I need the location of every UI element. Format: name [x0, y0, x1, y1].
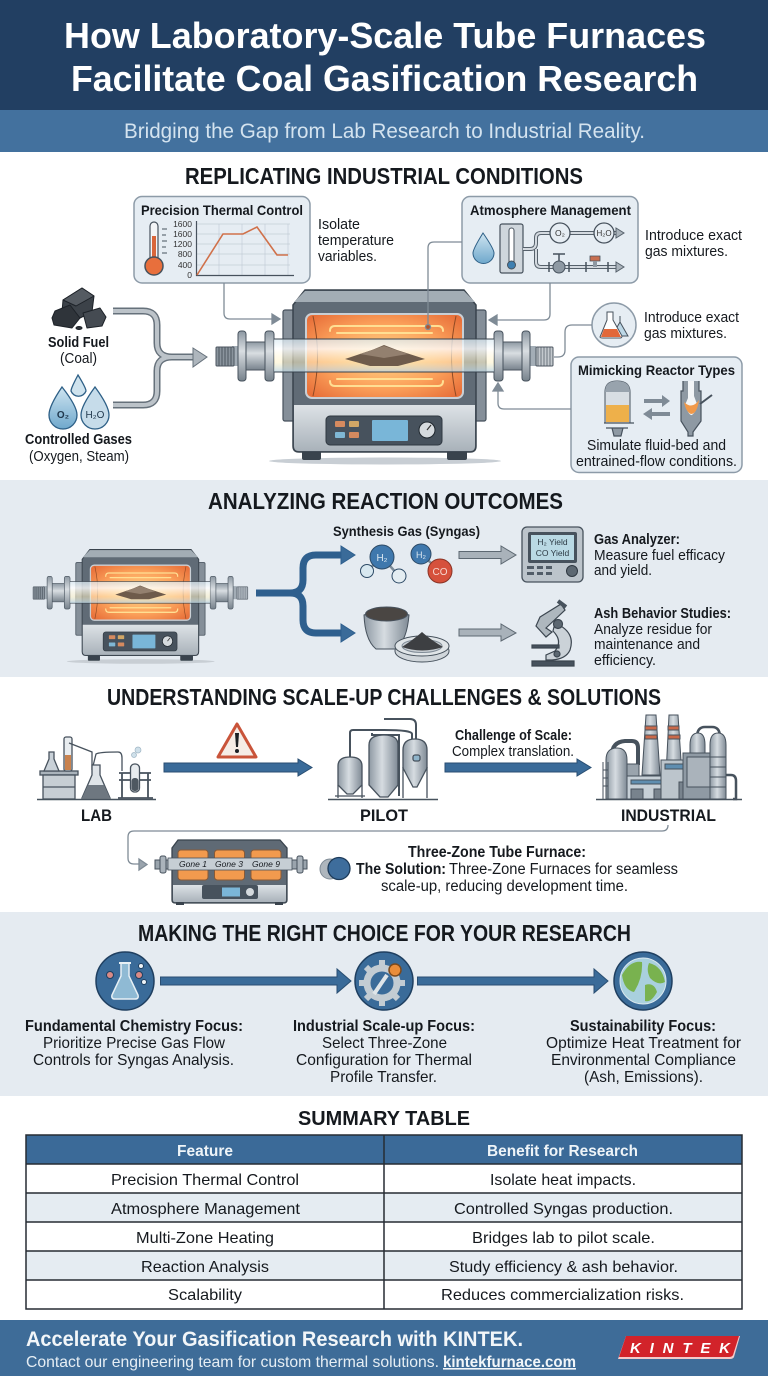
- icon: gear and wrench: [355, 952, 413, 1010]
- icon: microscope: [532, 601, 574, 666]
- note: isolate variables: variables.: [318, 249, 377, 265]
- label: solid fuel: Solid Fuel: [48, 335, 109, 351]
- heading: summary table: SUMMARY TABLE: [298, 1108, 470, 1130]
- text: three-zone solution: scale-up, reducing development time.: [381, 878, 628, 895]
- connectors: callouts to furnace: [224, 242, 592, 409]
- text: ash behavior: Ash Behavior Studies:: [594, 606, 731, 622]
- label: synthesis gas: Synthesis Gas (Syngas): [333, 524, 480, 539]
- text: three-zone solution: Three-Zone Tube Furnace:: [408, 844, 586, 861]
- note: gas mixtures: gas mixtures.: [645, 244, 728, 260]
- logo: KINTEK: [618, 1336, 740, 1359]
- icon: industrial plant: [596, 715, 742, 800]
- text: industrial scale-up: Select Three-Zone: [322, 1035, 447, 1052]
- callout: precision thermal control: [134, 196, 310, 283]
- contact line: kintekfurnace.com: [443, 1354, 576, 1371]
- text: three-zone solution: The Solution:: [356, 861, 446, 878]
- line chart: temperature profile: 1600: [173, 219, 192, 229]
- icon: chemistry flask: [96, 952, 154, 1010]
- text: fundamental chemistry: Fundamental Chemistry Focus:: [25, 1018, 243, 1035]
- line chart: temperature profile: [173, 219, 294, 280]
- text: sustainability: Sustainability Focus:: [570, 1018, 716, 1035]
- note: gas mixtures second: Introduce exact: [644, 310, 739, 326]
- text: gas analyzer: and yield.: [594, 563, 652, 579]
- icon: gas droplets: O₂: [57, 410, 69, 421]
- logo: KINTEK: KINTEK: [630, 1340, 731, 1357]
- connector: industrial to solution: [128, 825, 668, 870]
- icon: coal: [52, 288, 106, 330]
- icon: fluid-bed reactor: [604, 381, 634, 436]
- text: three-zone solution: [356, 844, 678, 895]
- line chart: temperature profile: 1600: [173, 229, 192, 239]
- text: gas analyzer: [594, 532, 726, 579]
- summary table: Multi-Zone Heating: [136, 1230, 274, 1247]
- text: fundamental chemistry: Prioritize Precise Gas Flow: [43, 1035, 225, 1052]
- text: challenge of scale: Complex translation.: [452, 744, 574, 760]
- text: gas analyzer: Gas Analyzer:: [594, 532, 680, 548]
- icon: pilot plant: [328, 719, 438, 800]
- text: sustainability: Environmental Compliance: [551, 1052, 736, 1069]
- text: fundamental chemistry: [25, 1018, 243, 1069]
- diagram: gas lines: O₂: [555, 228, 565, 238]
- note: isolate variables: [318, 217, 394, 265]
- icon: gas analyzer: [522, 527, 583, 582]
- icon: syngas molecules: H₂: [376, 553, 388, 564]
- icon: ash crucible and dish: [364, 607, 449, 662]
- line chart: temperature profile: 1200: [173, 239, 192, 249]
- icon: syngas molecules: H₂: [416, 550, 426, 560]
- summary table: Study efficiency & ash behavior.: [449, 1259, 678, 1276]
- text: sustainability: [546, 1018, 742, 1086]
- text: industrial scale-up: Industrial Scale-up Focus:: [293, 1018, 475, 1035]
- summary table: Scalability: [168, 1287, 242, 1304]
- subtitle: Bridging the Gap from Lab Research to Industrial Reality.: [124, 120, 645, 143]
- summary table: Bridges lab to pilot scale.: [472, 1230, 655, 1247]
- label: LAB: LAB: [81, 806, 112, 825]
- label: INDUSTRIAL: INDUSTRIAL: [621, 806, 716, 825]
- icon: water drop: [473, 233, 494, 264]
- note: gas mixtures: Introduce exact: [645, 228, 742, 244]
- text: challenge of scale: [452, 728, 574, 760]
- callout: mimicking reactor types: [571, 357, 742, 472]
- summary table: Isolate heat impacts.: [490, 1172, 636, 1189]
- summary table: Reaction Analysis: [141, 1259, 269, 1276]
- arrow: step two to three: [418, 969, 608, 993]
- text: ash behavior: efficiency.: [594, 653, 656, 669]
- icon: solution token: [320, 858, 350, 880]
- arrow: split outputs: [256, 546, 355, 642]
- label: solid fuel: (Coal): [60, 351, 97, 367]
- call to action: Accelerate Your Gasification Research with KINTEK.: [26, 1328, 523, 1351]
- arrow: pilot to industrial: [445, 759, 591, 776]
- summary table: Feature: [177, 1143, 233, 1160]
- text: industrial scale-up: [293, 1018, 475, 1086]
- note: gas mixtures: [645, 228, 742, 260]
- label: controlled gases: Controlled Gases: [25, 432, 132, 448]
- line chart: temperature profile: 0: [187, 270, 192, 280]
- icon: thermometer: [145, 222, 167, 275]
- panel: analyzing reaction outcomes: [33, 488, 731, 669]
- arrow: inputs to furnace: [113, 311, 207, 405]
- line chart: temperature profile: 400: [178, 260, 192, 270]
- icon: warning triangle: [218, 724, 256, 757]
- text: ash behavior: Analyze residue for: [594, 622, 712, 638]
- icon: entrained-flow reactor: [681, 381, 712, 436]
- heading: ANALYZING REACTION OUTCOMES: [208, 488, 563, 514]
- arrow: ash to microscope: [459, 624, 516, 641]
- callout: mimicking reactor types: Mimicking Reactor Types: [578, 362, 735, 378]
- icon: syngas molecules: CO: [432, 567, 448, 578]
- note: isolate variables: Isolate: [318, 217, 360, 233]
- icon: flasks: [592, 303, 636, 347]
- diagram: gas lines: H₂O: [596, 229, 612, 238]
- line chart: temperature profile: 800: [178, 249, 192, 259]
- text: ash behavior: [594, 606, 731, 669]
- icon: gas droplets: [49, 375, 109, 429]
- heading: MAKING THE RIGHT CHOICE FOR YOUR RESEARCH: [138, 920, 631, 946]
- footer banner: [0, 1320, 768, 1376]
- arrow: lab to pilot: [164, 759, 312, 776]
- title: [64, 15, 706, 99]
- contact line: Contact our engineering team for custom thermal solutions.: [26, 1354, 439, 1371]
- summary table: Benefit for Research: [487, 1143, 638, 1160]
- title: Facilitate Coal Gasification Research: [71, 58, 698, 99]
- summary table: Precision Thermal Control: [111, 1172, 299, 1189]
- summary table: [26, 1135, 742, 1309]
- callout: atmosphere management: Atmosphere Management: [470, 202, 631, 218]
- header banner: [0, 0, 768, 152]
- summary table: Atmosphere Management: [111, 1201, 301, 1218]
- text: sustainability: (Ash, Emissions).: [584, 1069, 703, 1086]
- icon: globe: [614, 952, 672, 1010]
- arrows: exchange: [643, 395, 670, 420]
- label: controlled gases: (Oxygen, Steam): [29, 449, 129, 465]
- heading: REPLICATING INDUSTRIAL CONDITIONS: [185, 163, 583, 189]
- text: three-zone solution: Three-Zone Furnaces for seamless: [449, 861, 678, 878]
- summary table: Controlled Syngas production.: [454, 1201, 673, 1218]
- icon: syngas molecules: [360, 544, 452, 583]
- panel: replicating industrial conditions: [25, 163, 742, 472]
- note: gas mixtures second: [644, 310, 739, 342]
- note: gas mixtures second: gas mixtures.: [644, 326, 727, 342]
- icon: three-zone tube furnace: Gone 1: [179, 859, 207, 869]
- text: challenge of scale: Challenge of Scale:: [455, 728, 572, 744]
- text: industrial scale-up: Configuration for Thermal: [296, 1052, 472, 1069]
- icon: three-zone tube furnace: Gone 9: [252, 859, 280, 869]
- panel: making the right choice: [25, 920, 742, 1086]
- furnace illustration: [216, 290, 553, 464]
- summary table: Reduces commercialization risks.: [441, 1287, 684, 1304]
- icon: three-zone tube furnace: Gone 3: [215, 859, 243, 869]
- heading: UNDERSTANDING SCALE-UP CHALLENGES & SOLUTIONS: [107, 684, 661, 710]
- icon: gas droplets: H₂O: [86, 410, 105, 421]
- text: gas analyzer: Measure fuel efficacy: [594, 548, 726, 564]
- furnace illustration small: [33, 549, 248, 664]
- callout: mimicking reactor types: entrained-flow conditions.: [576, 454, 737, 470]
- icon: gas analyzer: CO Yield: [536, 548, 570, 558]
- label: controlled gases: [25, 432, 132, 465]
- icon: three-zone tube furnace: [155, 840, 307, 905]
- text: industrial scale-up: Profile Transfer.: [330, 1069, 437, 1086]
- icon: gas analyzer: H₂ Yield: [537, 537, 568, 547]
- label: PILOT: PILOT: [360, 806, 409, 825]
- note: isolate variables: temperature: [318, 233, 394, 249]
- text: sustainability: Optimize Heat Treatment for: [546, 1035, 742, 1052]
- callout: mimicking reactor types: Simulate fluid-bed and: [587, 438, 726, 454]
- title: How Laboratory-Scale Tube Furnaces: [64, 15, 706, 56]
- arrow: syngas to analyzer: [459, 546, 516, 564]
- callout: precision thermal control: Precision Thermal Control: [141, 202, 303, 218]
- arrow: step one to two: [160, 969, 351, 993]
- callout: atmosphere management: [462, 196, 638, 283]
- text: ash behavior: maintenance and: [594, 637, 700, 653]
- icon: lab equipment: [37, 737, 156, 800]
- label: solid fuel: [48, 335, 109, 367]
- text: fundamental chemistry: Controls for Syngas Analysis.: [33, 1052, 234, 1069]
- diagram: gas lines: [523, 223, 624, 273]
- panel: scale-up challenges and solutions: [37, 684, 742, 905]
- icon: gauge panel: [500, 224, 523, 273]
